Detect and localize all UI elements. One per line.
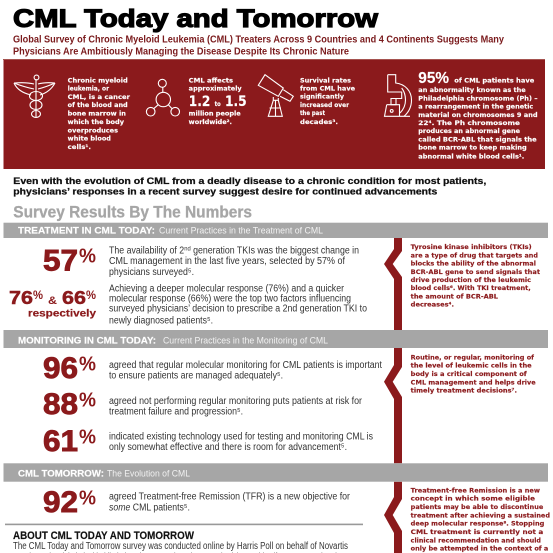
fact: definition of CML: cells¹. (68, 144, 91, 151)
fact: definition of CML: of the blood and (68, 103, 128, 109)
fact: number of people affected: 1.2 to 1.5 (189, 94, 247, 110)
stat: 61 percent: % (79, 427, 96, 449)
about section (13, 530, 357, 553)
callout: routine monitoring (411, 356, 536, 394)
fact: number of people affected (189, 78, 247, 126)
callout: TKIs: decreases⁴. (411, 302, 454, 309)
text: deeper molecular response: newly diagnosed patients⁵. (109, 315, 213, 326)
fact: Philadelphia chromosome: abnormal white blood cells¹. (418, 153, 524, 160)
fact: number of people affected: worldwide². (189, 119, 232, 126)
callout: TKIs: Tyrosine kinase inhibitors (TKIs) (411, 245, 532, 251)
header bar: tomorrow (4, 463, 548, 482)
chevron divider: monitoring (384, 348, 402, 463)
fact: definition of CML: white blood (68, 137, 111, 143)
stat: 76 and 66 percent: % (86, 288, 96, 302)
stat: 61 percent (43, 425, 96, 458)
callout: treatment-free remission: patients may be able to discontinue (411, 505, 543, 511)
fact: Philadelphia chromosome: bone marrow to keep making (418, 146, 527, 152)
text: risk of not monitoring: agreed not performing regular monitoring puts patients at risk for (109, 396, 363, 407)
text: deeper molecular response: surveyed physicians’ decision to prescribe a 2nd generation TKI to (109, 304, 367, 315)
about section: The CML Today and Tomorrow survey was conducted online by Harris Poll on behalf of Novartis (13, 541, 348, 552)
callout: routine monitoring: the level of leukemic cells in the (411, 364, 532, 370)
fact: Philadelphia chromosome: produces an abnormal gene (418, 129, 520, 135)
fact: survival rates: decades³. (300, 119, 338, 126)
header bar: monitoring (4, 330, 548, 348)
header bar: tomorrow: CML TOMORROW: (18, 468, 104, 478)
fact: definition of CML: overproduces (68, 128, 119, 134)
fact: definition of CML (68, 79, 130, 151)
stat: 76 and 66 percent: 66 (62, 288, 86, 308)
stat: 96 percent (43, 352, 96, 385)
subtitle (13, 34, 505, 57)
header bar: monitoring: Current Practices in the Monitoring of CML (163, 334, 328, 346)
stat: 76 and 66 percent: & (48, 295, 57, 307)
icon: microscope (384, 75, 412, 116)
text: deeper molecular response: Achieving a deeper molecular response (76%) and a quicker (109, 283, 345, 294)
text: regular monitoring important: agreed that regular molecular monitoring for CML patients is important (109, 360, 382, 371)
callout: routine monitoring: body is a critical component of (411, 372, 527, 378)
callout: treatment-free remission: only be attempted in the context of a (411, 547, 548, 553)
fact: survival rates (300, 79, 355, 126)
stat: 76 and 66 percent (9, 288, 97, 319)
text: availability of TKIs: physicians surveyed⁵. (109, 267, 194, 278)
callout: routine monitoring: timely treatment decisions⁷. (411, 387, 517, 394)
fact: Philadelphia chromosome (418, 70, 538, 160)
subtitle: Physicians Are Ambitiously Managing the Disease Despite Its Chronic Nature (13, 46, 350, 57)
stat: 76 and 66 percent: % (33, 288, 43, 302)
fact: survival rates: the past (300, 111, 325, 117)
fact: Philadelphia chromosome: 22⁴. The Ph chromosome (418, 120, 520, 127)
callout: treatment-free remission: CML treatment is currently not a (411, 530, 543, 536)
fact: number of people affected: CML affects (189, 78, 234, 84)
text: regular monitoring important: to ensure patients are managed adequately⁵. (109, 370, 283, 382)
stat: 57 percent: % (79, 246, 96, 268)
title: CML Today and Tomorrow (13, 5, 379, 33)
header bar: tomorrow: The Evolution of CML (107, 468, 190, 478)
callout: treatment-free remission: clinical recommendation and should (411, 538, 541, 544)
stat: 96 percent: % (79, 354, 96, 376)
fact: survival rates: from CML have (300, 87, 355, 93)
stat: 57 percent: 57 (43, 245, 78, 278)
text: availability of TKIs: The availability of 2 (109, 246, 193, 257)
callout: routine monitoring: Routine, or regular, monitoring of (411, 356, 534, 362)
text: existing technology (109, 432, 373, 453)
fact: Philadelphia chromosome: material on chromosomes 9 and (418, 113, 538, 119)
stat: 76 and 66 percent: respectively (28, 308, 97, 319)
callout: treatment-free remission (411, 488, 550, 553)
fact: survival rates: significantly (300, 95, 344, 101)
fact: survival rates: increased over (300, 103, 349, 109)
header bar: treatment (4, 223, 548, 238)
intro statement: physicians’ responses in a recent survey suggest desire for continued advancements (13, 186, 437, 196)
fact: definition of CML: bone marrow in (68, 111, 126, 117)
callout: TKIs: the amount of BCR-ABL (411, 294, 498, 300)
stat: 61 percent: 61 (43, 425, 78, 458)
chevron divider: treatment (384, 238, 402, 330)
stat: 88 percent: 88 (43, 388, 78, 421)
icon: telescope (258, 75, 293, 116)
chevron divider: tomorrow (384, 482, 402, 553)
fact: definition of CML: leukemia, or (68, 87, 109, 93)
callout: treatment-free remission: Treatment-free Remission is a new (411, 488, 541, 494)
callout: routine monitoring: CML management and helps drive (411, 380, 536, 386)
stat: 88 percent: % (79, 390, 96, 412)
text: regular monitoring important (109, 360, 382, 382)
intro statement (13, 176, 486, 196)
stat: 92 percent: 92 (43, 486, 78, 519)
callout: TKIs: blood cells⁶. With TKI treatment, (411, 285, 531, 292)
panel: key facts band (4, 60, 545, 169)
text: existing technology: only somewhat effective and there is room for advancement⁵. (109, 442, 347, 453)
text: availability of TKIs: generation TKIs was the biggest change in (191, 246, 359, 257)
text: treatment-free remission objective (109, 492, 351, 514)
text: existing technology: indicated existing technology used for testing and monitoring CML is (109, 432, 373, 442)
text: availability of TKIs (109, 246, 359, 278)
callout: TKIs: drive production of the leukemic (411, 278, 532, 284)
text: risk of not monitoring: treatment failure and progression⁵. (109, 406, 243, 418)
icon: molecule (146, 79, 180, 116)
text: availability of TKIs: nd (184, 246, 191, 253)
text: treatment-free remission objective: agreed Treatment-free Remission (TFR) is a new objective for (109, 492, 351, 503)
fact: number of people affected: approximately (189, 87, 242, 93)
callout: treatment-free remission: treatment after achieving a sustained (411, 513, 550, 519)
text: deeper molecular response (109, 283, 367, 326)
stat: 92 percent (43, 486, 96, 519)
text: treatment-free remission objective: some CML patients⁵. (109, 502, 190, 514)
fact: number of people affected: million people (189, 111, 241, 117)
callout: treatment-free remission: deep molecular response⁸. Stopping (411, 521, 544, 528)
fact: Philadelphia chromosome: an abnormality known as the (418, 88, 526, 94)
header bar: treatment: TREATMENT IN CML TODAY: (18, 226, 155, 236)
fact: Philadelphia chromosome: called BCR-ABL that signals the (418, 137, 537, 143)
stat: 92 percent: % (79, 488, 96, 510)
stat: 88 percent (43, 388, 96, 421)
fact: definition of CML: Chronic myeloid (68, 79, 128, 85)
fact: survival rates: Survival rates (300, 79, 352, 85)
stat: 76 and 66 percent: 76 (9, 288, 33, 308)
callout: treatment-free remission: concept in which some eligible (411, 497, 535, 503)
about section: ABOUT CML TODAY AND TOMORROW (13, 530, 194, 542)
icon: caduceus (14, 75, 55, 118)
header bar: treatment: Current Practices in the Treatment of CML (159, 224, 323, 236)
fact: Philadelphia chromosome: a rearrangement in the genetic (418, 104, 534, 110)
section heading: Survey Results By The Numbers (13, 203, 252, 221)
callout: TKIs: BCR-ABL gene to send signals that (411, 270, 540, 276)
fact: Philadelphia chromosome: Philadelphia chromosome (Ph) – (418, 96, 538, 102)
fact: definition of CML: which the body (68, 120, 124, 126)
fact: definition of CML: CML, is a cancer (68, 95, 130, 101)
fact: Philadelphia chromosome: of CML patients have (454, 79, 534, 85)
intro statement: Even with the evolution of CML from a deadly disease to a chronic condition for most patients, (13, 176, 486, 186)
text: risk of not monitoring (109, 396, 363, 418)
header bar: monitoring: MONITORING IN CML TODAY: (18, 336, 156, 346)
text: availability of TKIs: CML management in the last five years, selected by 57% of (109, 256, 345, 267)
subtitle: Global Survey of Chronic Myeloid Leukemia (CML) Treaters Across 9 Countries and 4 Continents Suggests Many (13, 34, 505, 45)
callout: TKIs: blocks the ability of the abnormal (411, 262, 536, 268)
stat: 57 percent (43, 245, 96, 278)
stat: 96 percent: 96 (43, 352, 78, 385)
fact: Philadelphia chromosome: 95% (418, 70, 449, 87)
callout: TKIs (411, 245, 540, 309)
callout: TKIs: are a type of drug that targets and (411, 253, 538, 259)
text: deeper molecular response: molecular response (66%) were the top two factors influencing (109, 294, 351, 305)
